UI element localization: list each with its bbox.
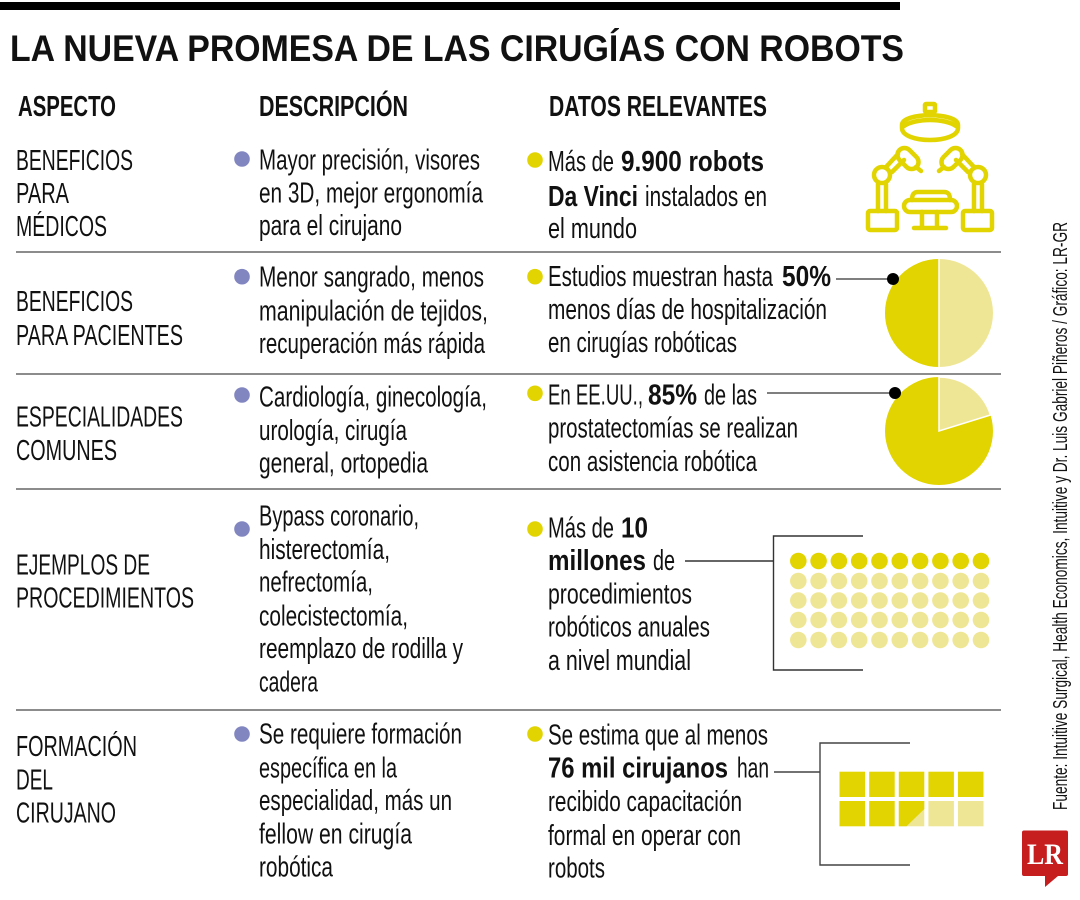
relevant data: Da Vinci [548, 181, 638, 213]
relevant data: 9.900 robots [621, 146, 764, 178]
row 2: beneficios para pacientes [16, 259, 993, 367]
description: nefrectomía, [259, 567, 373, 599]
relevant data [527, 513, 710, 677]
aspect label: PROCEDIMIENTOS [16, 583, 194, 615]
relevant data: robots [548, 853, 605, 885]
aspect label: MÉDICOS [16, 210, 107, 243]
relevant data: menos días de hospitalización [548, 294, 827, 326]
aspect label [16, 730, 137, 830]
row 1: beneficios para médicos [16, 104, 992, 245]
dot grid: 10 of 100 [685, 536, 989, 670]
description [234, 382, 487, 480]
logo: LR [1022, 830, 1068, 887]
top bar [0, 2, 900, 10]
aspect label: DEL [16, 764, 53, 796]
relevant data: recibido capacitación [548, 786, 742, 818]
relevant data [527, 146, 767, 245]
description: histerectomía, [259, 534, 390, 566]
description: general, ortopedia [259, 448, 429, 480]
row 4: ejemplos de procedimientos [16, 501, 989, 699]
pie chart: 50% [836, 259, 993, 367]
square grid: 7.6 of 10 [774, 743, 984, 865]
relevant data: prostatectomías se realizan [548, 413, 798, 445]
relevant data: millones [548, 545, 646, 577]
relevant data: En EE.UU., [548, 379, 643, 411]
description: Se requiere formación [259, 718, 462, 750]
relevant data: Se estima que al menos [548, 719, 768, 751]
description: cadera [259, 667, 319, 699]
row 3: especialidades comunes [16, 377, 993, 485]
relevant data: procedimientos [548, 578, 692, 610]
aspect label: PARA PACIENTES [16, 320, 183, 352]
relevant data: a nivel mundial [548, 645, 691, 677]
relevant data: robóticos anuales [548, 612, 710, 644]
description: en 3D, mejor ergonomía [259, 178, 484, 210]
aspect label: BENEFICIOS [16, 145, 133, 177]
aspect label: BENEFICIOS [16, 286, 133, 318]
relevant data: de las [704, 379, 757, 411]
relevant data: instalados en [645, 181, 767, 213]
relevant data: formal en operar con [548, 820, 741, 852]
relevant data: han [737, 753, 769, 785]
description: urología, cirugía [259, 415, 408, 447]
column heading: aspecto: ASPECTO [18, 91, 116, 123]
aspect label [16, 145, 133, 243]
description: Mayor precisión, visores [259, 144, 480, 176]
aspect label: ESPECIALIDADES [16, 402, 183, 434]
aspect label: CIRUJANO [16, 798, 116, 830]
description [234, 718, 462, 884]
aspect label [16, 549, 194, 615]
relevant data: en cirugías robóticas [548, 327, 737, 359]
aspect label: EJEMPLOS DE [16, 549, 150, 581]
description: Bypass coronario, [259, 501, 419, 533]
title: LA NUEVA PROMESA DE LAS CIRUGÍAS CON ROBOTS [10, 28, 904, 69]
relevant data: con asistencia robótica [548, 446, 758, 478]
relevant data: 10 [621, 513, 648, 545]
pie chart: 85% [767, 377, 993, 485]
description: reemplazo de rodilla y [259, 633, 463, 665]
relevant data: 76 mil cirujanos [548, 753, 728, 785]
row 5: formación del cirujano [16, 718, 984, 885]
description: Menor sangrado, menos [259, 262, 484, 294]
relevant data: Más de [548, 513, 614, 545]
description: especialidad, más un [259, 785, 452, 817]
relevant data: de [653, 545, 675, 577]
relevant data: 50% [782, 261, 831, 293]
aspect label: COMUNES [16, 435, 117, 467]
relevant data [527, 261, 831, 359]
description: específica en la [259, 752, 398, 784]
logo: LR: LR [1027, 838, 1063, 871]
description [234, 501, 463, 699]
description: fellow en cirugía [259, 818, 413, 850]
description: Cardiología, ginecología, [259, 382, 487, 414]
description: robótica [259, 852, 334, 884]
relevant data: Estudios muestran hasta [548, 261, 774, 293]
description: manipulación de tejidos, [259, 296, 488, 328]
aspect label: PARA [16, 178, 69, 210]
relevant data: 85% [648, 379, 697, 411]
description [234, 144, 484, 242]
description: para el cirujano [259, 210, 402, 242]
relevant data: Más de [548, 146, 614, 178]
icon: surgical robot [868, 104, 992, 230]
column heading: descripción: DESCRIPCIÓN [259, 89, 408, 123]
aspect label: FORMACIÓN [16, 730, 137, 763]
relevant data [527, 719, 769, 885]
description: recuperación más rápida [259, 328, 486, 360]
column heading: datos relevantes: DATOS RELEVANTES [549, 91, 767, 123]
aspect label [16, 402, 183, 467]
description: colecistectomía, [259, 601, 408, 633]
description [234, 262, 488, 360]
relevant data [527, 379, 798, 478]
relevant data: el mundo [548, 213, 637, 245]
aspect label [16, 286, 183, 352]
